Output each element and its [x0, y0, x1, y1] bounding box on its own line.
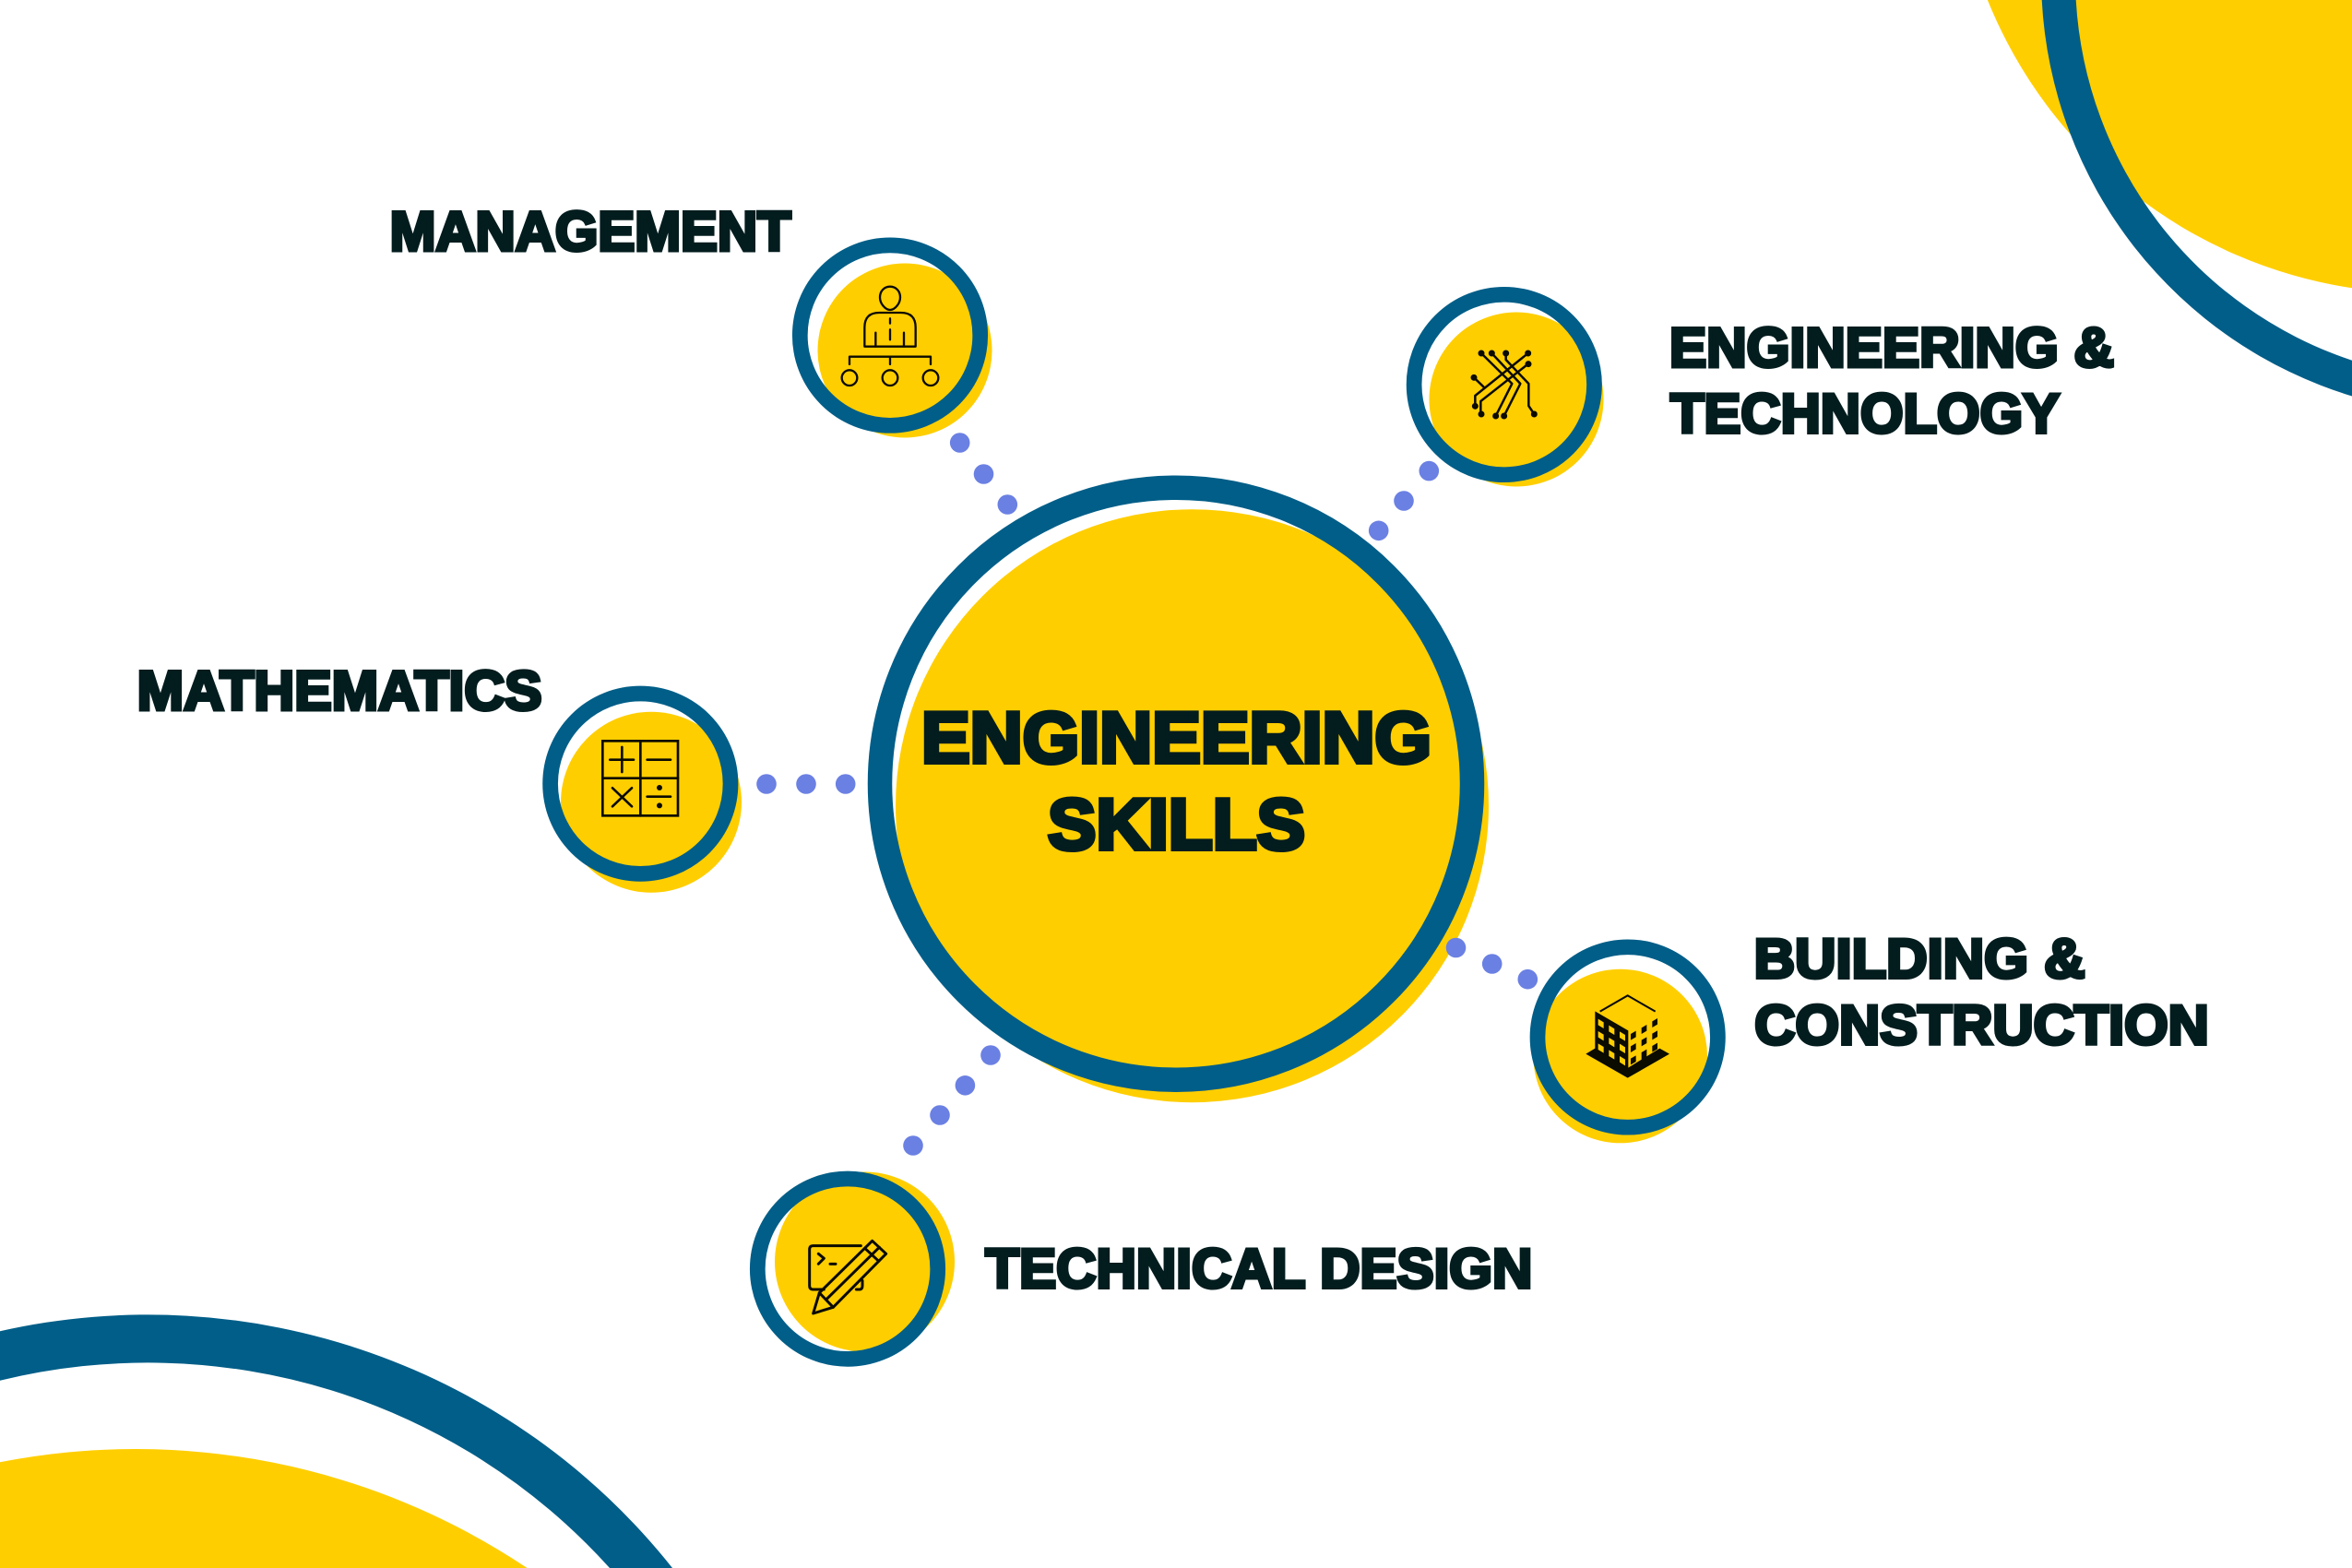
- icon: apartment building: [1586, 995, 1669, 1078]
- dotted connector: mathematics: [756, 774, 856, 794]
- dotted connector: technical design: [903, 1045, 1001, 1156]
- label: building and construction: BUILDING &: [1754, 928, 2085, 990]
- node: engineering and technology: [1414, 294, 1603, 487]
- label: building and construction: [1754, 928, 2209, 1056]
- icon: manager with org chart: [842, 287, 938, 386]
- icon: calculator operators: [602, 741, 678, 815]
- dotted connector: management: [950, 433, 1017, 515]
- central circle: [880, 488, 1489, 1102]
- decoration: bottom left corner arcs: [0, 1314, 672, 1568]
- label: building and construction: CONSTRUCTION: [1754, 994, 2209, 1056]
- node: mathematics: [551, 694, 742, 893]
- label: management: MANAGEMENT: [390, 201, 791, 263]
- label: engineering and technology: ENGINEERING &: [1669, 317, 2114, 379]
- label: engineering and technology: [1669, 317, 2114, 445]
- dotted connector: building and construction: [1446, 938, 1538, 989]
- label: engineering and technology: TECHNOLOGY: [1670, 383, 2060, 445]
- icon: circuit traces: [1470, 350, 1538, 419]
- label: technical design: TECHNICAL DESIGN: [985, 1238, 1532, 1300]
- title: ENGINEERING: [921, 697, 1431, 778]
- label: mathematics: MATHEMATICS: [137, 660, 542, 722]
- title: SKILLS: [1048, 784, 1305, 865]
- dotted connector: engineering and technology: [1369, 461, 1439, 540]
- decoration: top right corner arcs: [1988, 0, 2352, 397]
- node: management: [800, 245, 992, 437]
- icon: terminal with pencil: [810, 1241, 886, 1313]
- node: technical design: [757, 1171, 955, 1359]
- title: [921, 697, 1431, 865]
- node: building and construction: [1533, 947, 1717, 1143]
